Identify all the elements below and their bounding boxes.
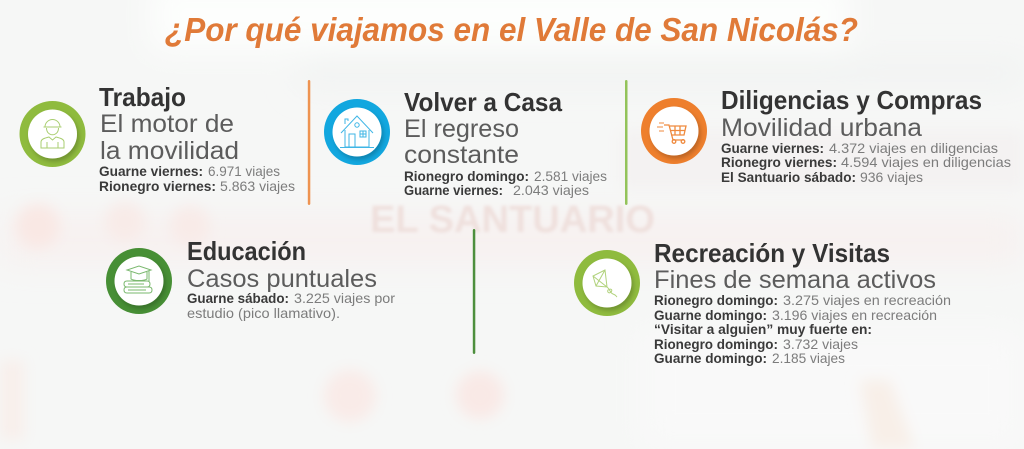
panel: Diligencias y Compras <box>641 85 1011 185</box>
text block: Recreación data <box>654 292 951 366</box>
heading: Educación: Educación <box>187 236 306 266</box>
heading: Recreación y Visitas: Recreación y Visitas <box>654 238 890 268</box>
text block: Trabajo data: 5.863 viajes <box>220 178 295 194</box>
text block: Educación data: 3.225 viajes por <box>294 290 395 306</box>
text block: Diligencias data: 936 viajes <box>860 169 923 185</box>
text block: Recreación data: 3.196 viajes en recreación <box>772 307 937 323</box>
text block: Recreación data: 2.185 viajes <box>772 350 845 366</box>
subheading: Movilidad urbana: Movilidad urbana <box>721 114 922 142</box>
subheading: El motor de la movilidad: El motor de <box>100 110 234 138</box>
text block: Recreación data: 3.732 viajes <box>783 336 858 352</box>
subheading: El motor de la movilidad <box>100 110 239 165</box>
heading: Volver a Casa: Volver a Casa <box>404 87 563 117</box>
icon: worker <box>20 101 86 167</box>
subheading: Casos puntuales: Casos puntuales <box>187 265 377 293</box>
icon: shopping cart <box>641 98 707 164</box>
text block: Volver a Casa data: 2.043 viajes <box>513 182 589 198</box>
text block: Diligencias data: El Santuario sábado: <box>721 169 856 185</box>
panel: Recreación y Visitas <box>574 238 951 366</box>
text block: Recreación data: Rionegro domingo: <box>654 336 778 352</box>
text block: Recreación data: Guarne domingo: <box>654 307 767 323</box>
text block: Volver a Casa data <box>404 168 607 198</box>
icon: graduation cap and books <box>106 248 172 314</box>
text block: Trabajo data: Rionegro viernes: <box>99 178 216 194</box>
icon: house <box>324 99 390 165</box>
divider: light green <box>625 80 628 205</box>
divider: orange <box>308 80 310 205</box>
title: ¿Por qué viajamos en el Valle de San Nicolás? <box>165 11 858 48</box>
text block: Educación data: estudio (pico llamativo). <box>187 305 340 321</box>
text block: Recreación data: Rionegro domingo: <box>654 292 778 308</box>
heading: Diligencias y Compras: Diligencias y Compras <box>721 85 982 115</box>
text block: Diligencias data: 4.372 viajes en diligencias <box>829 140 998 156</box>
subheading: El regreso constante: El regreso <box>404 115 519 143</box>
background lettering on the bus: EL SANTUARIO <box>370 199 655 241</box>
text block: Educación data: Guarne sábado: <box>187 290 289 306</box>
subheading: Fines de semana activos: Fines de semana activos <box>654 266 936 294</box>
heading: Trabajo: Trabajo <box>99 82 186 112</box>
icon: kite <box>574 250 640 316</box>
panel: Volver a Casa <box>324 87 607 198</box>
text block: Volver a Casa data: Rionegro domingo: <box>404 168 529 184</box>
subheading: El regreso constante: constante <box>404 141 519 169</box>
text block: Trabajo data <box>99 163 295 194</box>
text block: Educación data <box>187 290 395 321</box>
text block: Trabajo data: Guarne viernes: <box>99 163 203 179</box>
text block: Diligencias data <box>721 140 1011 185</box>
divider: dark green <box>473 229 475 354</box>
text block: Diligencias data: Guarne viernes: <box>721 140 824 156</box>
text block: Recreación data: 3.275 viajes en recreación <box>783 292 951 308</box>
panel: Educación <box>106 236 395 321</box>
text block: Recreación data: “Visitar a alguien” muy fuerte en: <box>654 321 872 337</box>
text block: Recreación data: Guarne domingo: <box>654 350 767 366</box>
subheading: El regreso constante <box>404 115 519 169</box>
text block: Diligencias data: 4.594 viajes en diligencias <box>841 154 1011 170</box>
text block: Volver a Casa data: 2.581 viajes <box>534 168 607 184</box>
text block: Trabajo data: 6.971 viajes <box>208 163 280 179</box>
panel: Trabajo <box>20 82 295 194</box>
text block: Volver a Casa data: Guarne viernes: <box>404 182 503 198</box>
text block: Diligencias data: Rionegro viernes: <box>721 154 837 170</box>
subheading: El motor de la movilidad: la movilidad <box>100 137 239 165</box>
